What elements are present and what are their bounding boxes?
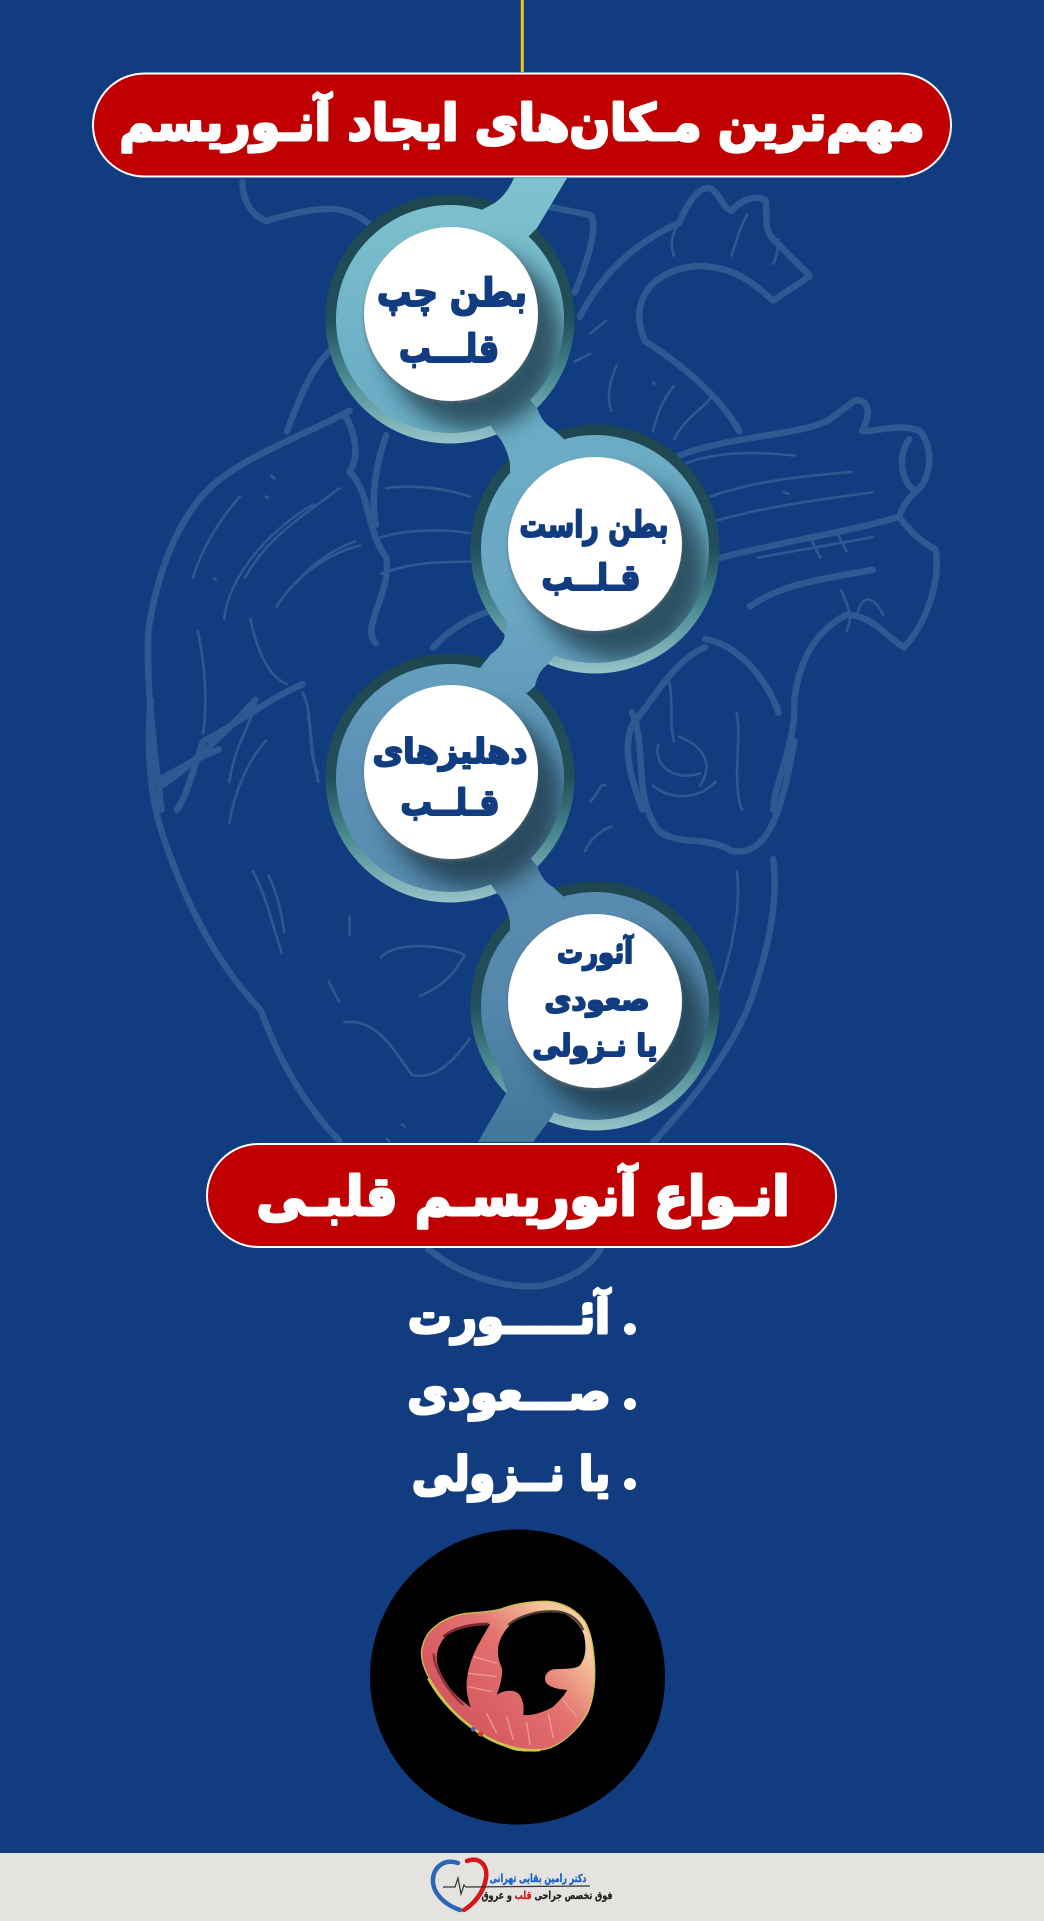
label: دهلیزهای — [372, 732, 528, 772]
yellow connector line — [521, 0, 524, 72]
label: بطن چپ — [377, 271, 527, 316]
logo heart red — [464, 1860, 486, 1910]
label line 2: قـلــب — [542, 558, 640, 599]
label: بطن راست — [520, 505, 668, 546]
disc shadow 1 — [386, 250, 562, 430]
doctor name: دکتر رامین بقایی تهرانی — [490, 1872, 587, 1885]
disc shadow 4 — [531, 937, 707, 1117]
heart cross-section image — [370, 1530, 665, 1824]
ecg line — [443, 1878, 590, 1894]
bullet 3: یا نــزولی — [412, 1447, 610, 1502]
section heading pill — [207, 1144, 836, 1247]
title pill — [93, 74, 951, 176]
title text: مهم‌ترین مـکان‌های ایجاد آنـوریسم — [120, 92, 924, 153]
circle 4: aorta — [508, 914, 682, 1088]
label line 2: صعودی — [544, 983, 650, 1018]
ring 4 — [470, 882, 720, 1130]
label line 3: یا نـزولی — [532, 1029, 658, 1064]
fat edge and vessels — [428, 1678, 540, 1750]
label: آئورت — [557, 934, 634, 971]
footer band — [0, 1853, 1044, 1921]
bullet 1: آئـــــورت — [408, 1287, 612, 1345]
logo heart blue — [433, 1862, 460, 1910]
ring 3 — [326, 654, 574, 902]
ribbon chain with four rings — [326, 178, 720, 1142]
right cavity — [497, 1611, 585, 1715]
disc shadow 3 — [386, 709, 562, 889]
specialty: فوق تخصص جراحی قلب و عروق — [482, 1889, 612, 1902]
label line 2: قـلــب — [400, 783, 500, 824]
muscle fibres — [468, 1657, 577, 1745]
section heading text: انـواع آنوریسـم قلبـی — [256, 1163, 790, 1228]
circle 3: atria — [364, 685, 538, 859]
left cavity — [437, 1623, 490, 1707]
circle 2: right ventricle — [508, 457, 682, 631]
ribbon body — [336, 178, 709, 1142]
myocardium wall — [421, 1601, 595, 1751]
ring 2 — [470, 424, 720, 674]
trabeculae shading — [443, 1624, 488, 1637]
circle 1: left ventricle — [364, 227, 538, 401]
label line 2: قلـــب — [399, 327, 499, 372]
endocardium shading — [508, 1611, 583, 1630]
bullet list — [408, 1287, 636, 1502]
disc shadow 2 — [531, 480, 707, 660]
footer logo — [433, 1860, 612, 1910]
ring 1 — [326, 194, 574, 444]
heart line illustration — [148, 182, 937, 1286]
bullet 2: صـــعودی — [408, 1366, 610, 1421]
